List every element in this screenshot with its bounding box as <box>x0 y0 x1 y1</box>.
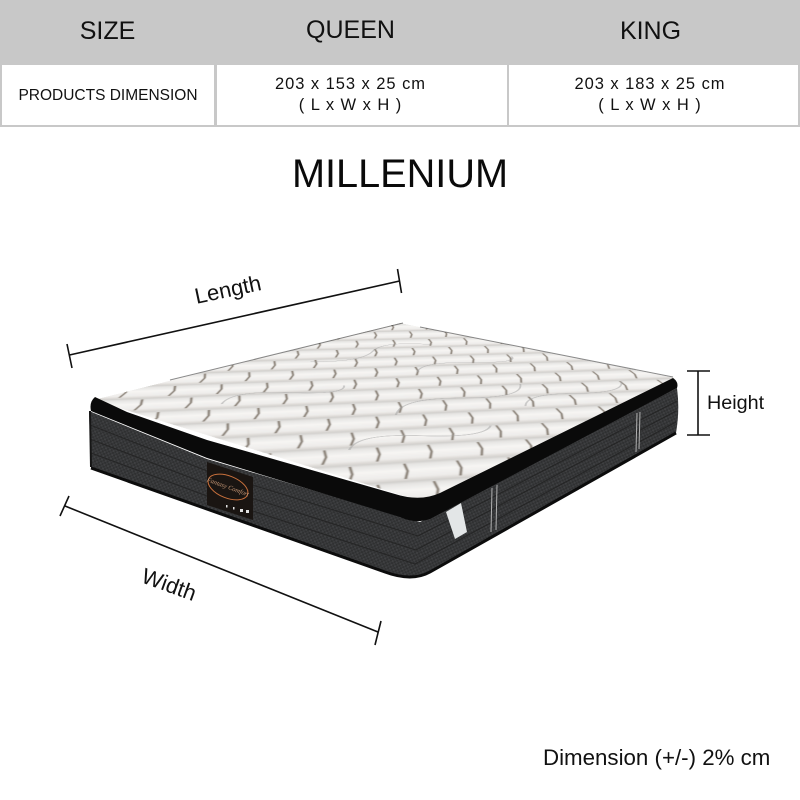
side stitching <box>491 412 640 532</box>
brand label: Fantasy Comfort <box>205 476 250 498</box>
white care tag <box>446 503 467 539</box>
black pillow-top band <box>90 378 678 521</box>
panel: size table <box>0 0 800 127</box>
heading: queen: QUEEN <box>306 16 395 44</box>
brand label <box>204 462 253 520</box>
cell: queen dimensions <box>217 65 507 125</box>
cell: queen dimensions: ( L x W x H ) <box>299 96 402 114</box>
cell: king dimensions: ( L x W x H ) <box>598 96 702 114</box>
heading: king: KING <box>620 17 681 45</box>
tolerance note: Dimension (+/-) 2% cm <box>543 745 770 770</box>
quilted top surface <box>98 323 674 498</box>
label: length: Length <box>192 270 263 309</box>
label: height: Height <box>707 392 764 414</box>
title: MILLENIUM <box>292 152 508 196</box>
label: width: Width <box>138 563 200 606</box>
cell: king dimensions <box>509 65 798 125</box>
back edge shadow <box>170 323 673 380</box>
cell: products dimension: PRODUCTS DIMENSION <box>18 87 198 104</box>
cell: products dimension <box>2 65 214 125</box>
cell: king dimensions: 203 x 183 x 25 cm <box>574 75 725 93</box>
heading: size: SIZE <box>80 17 135 45</box>
cell: queen dimensions: 203 x 153 x 25 cm <box>275 75 426 93</box>
